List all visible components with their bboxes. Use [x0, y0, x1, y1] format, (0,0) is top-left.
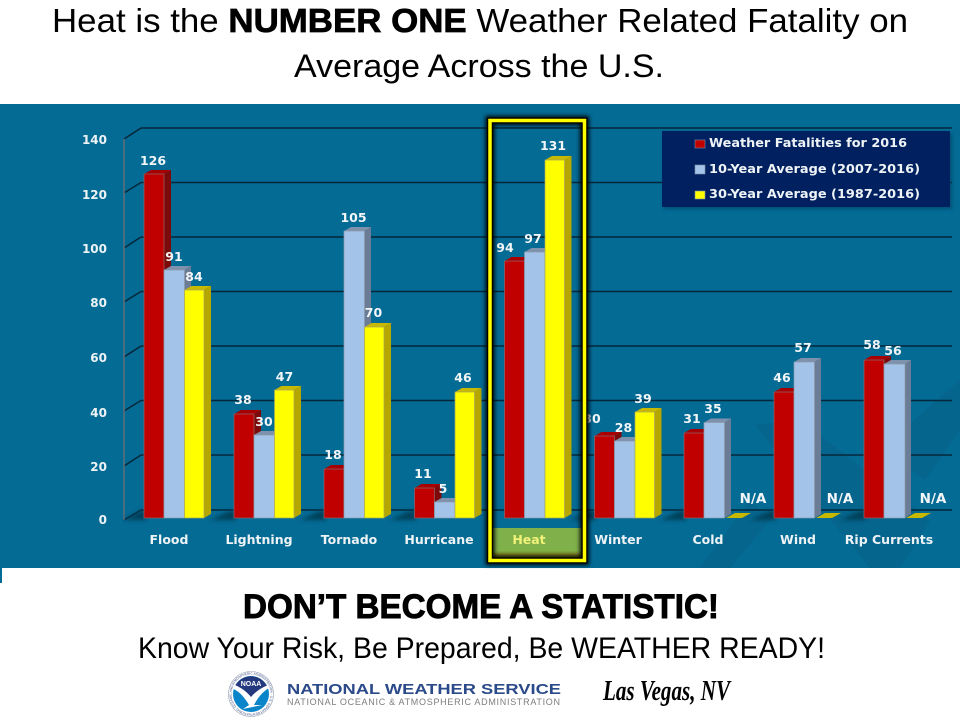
group: Cold: N/A: [740, 491, 767, 507]
group: Lightning: 38: [234, 392, 252, 407]
group: Winter: 30: [583, 411, 601, 426]
group: Rip Currents: 56: [884, 343, 902, 358]
y axis labels: [82, 133, 107, 527]
bar floor shadows: [124, 511, 866, 520]
heat highlight box: [490, 120, 584, 560]
group: Tornado: 105: [340, 210, 367, 225]
group: Rip Currents: N/A: [920, 491, 947, 507]
group: Heat: 94: [496, 240, 514, 255]
legend: Weather Fatalities for 2016: [709, 135, 907, 150]
group: Winter: [583, 391, 662, 518]
group: Hurricane: 5: [439, 481, 447, 496]
group: Flood: 84: [185, 269, 203, 284]
title: Heat is the NUMBER ONE Weather Related Fatality on: [52, 2, 908, 39]
category labels: Hurricane: [404, 532, 474, 547]
heat highlight box: Heat: [512, 532, 546, 547]
legend: 10-Year Average (2007-2016): [709, 161, 920, 176]
bar chart: [82, 128, 952, 547]
group: Hurricane: 11: [414, 466, 432, 481]
category labels: Winter: [594, 532, 643, 547]
group: Flood: 126: [140, 153, 166, 168]
group: Heat: 131: [540, 138, 566, 153]
group: Wind: N/A: [827, 491, 854, 507]
group: Flood: 91: [165, 249, 183, 264]
icon: NOAA logo: [228, 671, 274, 717]
group: Wind: 57: [794, 340, 812, 355]
title: [52, 2, 908, 84]
icon: NOAA logo: NATIONAL OCEANIC AND ATMOSPHERIC ADMINISTRATION · U.S. DEPARTMENT OF COMMERCE: [229, 672, 273, 716]
y axis labels: 0: [99, 513, 107, 527]
group: Cold: [683, 401, 767, 518]
group: Heat: 97: [524, 231, 542, 246]
legend: 30-Year Average (1987-2016): [709, 186, 920, 201]
callout: be weather ready: Know Your Risk, Be Prepared, Be WEATHER READY!: [138, 632, 825, 665]
title: Average Across the U.S.: [294, 48, 664, 84]
category labels: [150, 532, 933, 547]
y axis labels: 140: [82, 133, 107, 147]
group: Wind: 46: [773, 370, 791, 385]
National Weather Service wordmark: NATIONAL WEATHER SERVICE: [287, 681, 561, 698]
chart gridlines and axis: [124, 128, 952, 520]
group: Lightning: 30: [255, 414, 273, 429]
group: Flood: [140, 153, 211, 518]
panel: chart background: [0, 104, 960, 583]
y axis labels: 120: [82, 188, 107, 202]
group: Winter: 28: [615, 420, 632, 435]
category labels: Tornado: [321, 532, 378, 547]
group: Winter: 39: [634, 391, 652, 406]
group: Wind: [773, 340, 854, 518]
category labels: Wind: [780, 532, 816, 547]
category labels: Rip Currents: [845, 532, 933, 547]
group: Rip Currents: 58: [863, 337, 881, 352]
group: Cold: 35: [704, 401, 722, 416]
category labels: Cold: [692, 532, 724, 547]
icon: NOAA logo: NOAA: [241, 681, 261, 688]
group: Rip Currents: [863, 337, 947, 518]
y axis labels: 40: [90, 406, 107, 420]
y axis labels: 80: [90, 296, 107, 310]
category labels: Lightning: [225, 532, 293, 547]
group: Cold: 31: [683, 411, 701, 426]
group: Lightning: [234, 369, 301, 518]
callout: don't become a statistic: DON’T BECOME A STATISTIC!: [243, 588, 719, 626]
group: Tornado: 70: [365, 305, 382, 320]
category labels: Flood: [150, 532, 188, 547]
legend: [662, 131, 952, 209]
group: Lightning: 47: [276, 369, 293, 384]
y axis labels: 60: [90, 351, 107, 365]
group: Tornado: [324, 210, 391, 518]
Las Vegas signature: Las Vegas, NV: [602, 675, 732, 707]
group: Hurricane: [414, 370, 482, 518]
y axis labels: 100: [82, 242, 107, 256]
group: Heat: [496, 138, 572, 518]
group: Hurricane: 46: [454, 370, 472, 385]
National Weather Service wordmark: NATIONAL OCEANIC & ATMOSPHERIC ADMINISTRATION: [287, 697, 560, 707]
group: Tornado: 18: [324, 447, 342, 462]
National Weather Service wordmark: [287, 681, 561, 707]
y axis labels: 20: [90, 460, 107, 474]
